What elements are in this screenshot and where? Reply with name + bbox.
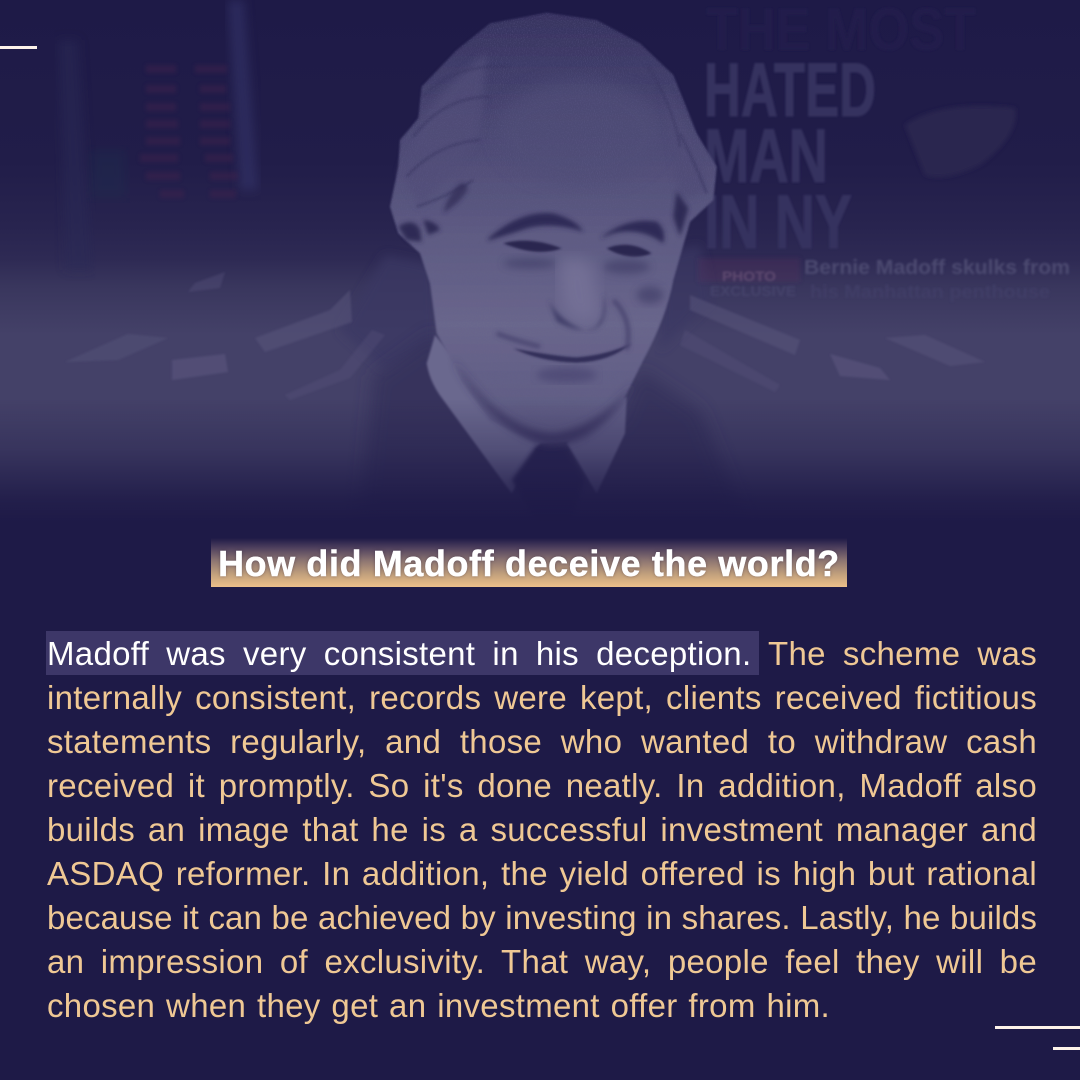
- head and hair silhouette: [390, 13, 717, 443]
- decoration: top-left line: [0, 46, 37, 49]
- body paragraph: Madoff was very consistent in his deception. The scheme was: [47, 635, 1037, 672]
- body paragraph: an impression of exclusivity. That way, people feel they will be: [47, 943, 1037, 980]
- newspaper headline: [704, 0, 1070, 302]
- hair strands: [407, 63, 707, 207]
- first sentence highlight: [46, 631, 759, 675]
- bottom fade of hero: [0, 0, 1080, 540]
- hero photo: Madoff portrait over trading floor and newspaper: [0, 0, 1080, 493]
- newspaper headline: EXCLUSIVE: [710, 283, 796, 300]
- body paragraph: statements regularly, and those who wanted to withdraw cash: [47, 723, 1037, 760]
- body paragraph: [47, 635, 1037, 1024]
- trading screens background: [58, 0, 258, 270]
- lower lip shade: [537, 367, 597, 383]
- smile lines: [497, 300, 628, 350]
- jacket: [360, 333, 747, 523]
- nose highlight: [559, 258, 600, 322]
- ear and temple shadows: [398, 183, 688, 242]
- body paragraph: internally consistent, records were kept, clients received fictitious: [47, 679, 1037, 716]
- newspaper headline: MAN: [704, 114, 828, 199]
- body paragraph: because it can be achieved by investing in shares. Lastly, he builds: [47, 899, 1037, 936]
- body paragraph: received it promptly. So it's done neatly. In addition, Madoff also: [47, 767, 1037, 804]
- newspaper red tag and hat: [698, 106, 1016, 282]
- hair side tones: [400, 53, 710, 207]
- eye shadows: [503, 258, 663, 304]
- decoration: bottom-right long line: [995, 1026, 1080, 1029]
- eyes: [503, 241, 652, 257]
- newspaper headline: his Manhattan penthouse: [810, 282, 1050, 302]
- face grain texture: [392, 13, 715, 214]
- heading: How did Madoff deceive the world?: [218, 544, 840, 584]
- shirt collar right: [567, 397, 627, 493]
- body paragraph: chosen when they get an investment offer from him.: [47, 987, 830, 1024]
- newspaper headline: HATED: [704, 48, 876, 133]
- newspaper headline: Bernie Madoff skulks from: [804, 257, 1070, 279]
- body paragraph: ASDAQ reformer. In addition, the yield offered is high but rational: [47, 855, 1037, 892]
- decoration: bottom-right short line: [1053, 1047, 1080, 1050]
- body paragraph: builds an image that he is a successful investment manager and: [47, 811, 1037, 848]
- heading highlight: [211, 538, 847, 587]
- trading floor shapes, left: [65, 272, 385, 400]
- portrait: Bernard Madoff: [371, 12, 718, 490]
- mouth line: [513, 343, 632, 363]
- shirt collar left: [427, 335, 540, 493]
- newspaper headline: IN NY: [704, 180, 852, 265]
- jaw shadow: [453, 360, 633, 445]
- nose underside: [548, 293, 605, 330]
- newspaper headline: PHOTO: [722, 268, 776, 284]
- eyebrows: [488, 213, 664, 243]
- speckled texture left and right of head: [340, 245, 712, 370]
- tie: [512, 445, 585, 523]
- trading floor shapes, right: [680, 295, 985, 392]
- forehead light: [497, 80, 663, 187]
